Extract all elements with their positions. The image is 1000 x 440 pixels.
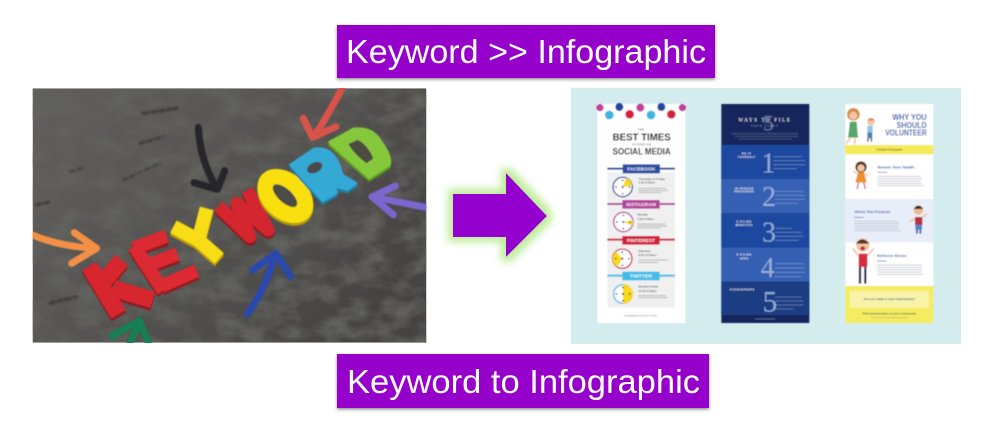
arrow: purple: [372, 186, 426, 215]
section: Boosts Your Health: [878, 165, 924, 186]
infographic: why you should volunteer: A Helpful Infographic: [876, 148, 903, 152]
step 4: APPS: [740, 258, 749, 261]
illustration: woman and child: [846, 108, 875, 144]
section: Boosts Your Health: Boosts Your Health: [878, 165, 915, 170]
step 4: [737, 253, 805, 284]
banner: Pinterest: [607, 236, 675, 245]
call to action: Are you ready to start volunteering?: [864, 297, 915, 301]
arrow: purple block arrow with green glow: [453, 173, 547, 257]
banner: Instagram: INSTAGRAM: [626, 202, 656, 208]
infographic: best times to post on social media: THE: [638, 127, 644, 131]
illustration: man: [853, 238, 874, 284]
title: VOLUNTEER: [885, 129, 927, 138]
footer text: [ BUSINESS SOCIETY.COM ]: [624, 316, 658, 318]
text: Instagram times: [637, 213, 667, 228]
section: Relieves Stress: Relieves Stress: [877, 253, 907, 258]
clock: Instagram: [614, 212, 633, 232]
step 2: 2: [762, 182, 776, 213]
arrow: black: [194, 127, 225, 189]
infographic: best times to post on social media: [596, 103, 686, 323]
section: Gives You Purpose: [854, 209, 900, 231]
title: WHY YOU: [892, 113, 927, 122]
title: Keyword >> Infographic: [337, 25, 715, 78]
step 3: E-FILING: [737, 222, 752, 224]
text: Facebook times: [638, 177, 668, 193]
letter R: [291, 149, 356, 203]
step 2: [734, 182, 805, 213]
illustration: girl: [853, 161, 868, 189]
banner: Twitter: [607, 272, 675, 280]
text: Twitter times: 12:00-6:00pm: [638, 289, 657, 293]
letter O: [256, 168, 314, 226]
step 5: [730, 287, 803, 319]
text: Pinterest times: Saturday: [638, 249, 651, 253]
header: [732, 110, 798, 139]
title: Keyword >> Infographic: Keyword >> Infographic: [346, 33, 706, 70]
panel: infographic examples: [571, 88, 961, 344]
title: Keyword to Infographic: Keyword to Infographic: [347, 363, 700, 400]
text: Facebook times: 1:00-3:00pm: [638, 181, 656, 185]
banner: Facebook: [607, 164, 675, 173]
text: Pinterest times: [638, 249, 668, 263]
banner: Instagram: [607, 200, 675, 209]
title: Keyword to Infographic: [337, 354, 709, 408]
step 2: IN-PERSON: [735, 188, 754, 190]
header: WAYS TO FILE: [738, 119, 792, 124]
text: Facebook times: Thursday & Friday: [638, 177, 666, 181]
section: Gives You Purpose: Gives You Purpose: [854, 209, 891, 214]
step 1: YOURSELF: [738, 157, 756, 159]
infographic: best times to post on social media: TO POST ON: [632, 142, 651, 146]
letter K: [89, 260, 153, 317]
step 5: 5: [763, 287, 777, 319]
call to action: [862, 297, 917, 318]
letter Y: [173, 208, 219, 261]
arrow: green: [112, 321, 148, 343]
infographic: why you should volunteer: [845, 104, 933, 323]
step 1: [738, 148, 805, 179]
infographic: 5 ways to file your taxes: [721, 104, 809, 323]
step 2: PREPARERS: [734, 191, 754, 194]
arrow: red: [303, 88, 342, 137]
infographic: best times to post on social media: SOCIAL MEDIA: [613, 147, 671, 157]
banner: Pinterest: PINTEREST: [627, 238, 655, 244]
clock: Twitter: [614, 284, 633, 304]
call to action: Find opportunities in your community: [862, 312, 917, 316]
clock: Pinterest: [613, 249, 632, 268]
photo: colourful KEYWORD letters with arrows: [33, 88, 426, 343]
text: Instagram times: 3:00-4:00pm: [637, 217, 655, 221]
title: [885, 113, 927, 138]
illustration: boy: [909, 205, 927, 234]
text: Twitter times: Monday-Friday: [638, 285, 659, 289]
step 3: [736, 217, 803, 248]
arrow: blue: [247, 253, 291, 314]
section: Relieves Stress: [877, 253, 924, 275]
step 4: 4: [761, 253, 775, 284]
step 3: WEBSITES: [736, 225, 753, 227]
step 1: DO IT: [742, 154, 751, 156]
banner: Facebook: FACEBOOK: [627, 167, 656, 173]
arrow: orange: [33, 233, 97, 263]
step 3: 3: [762, 217, 776, 248]
title: SHOULD: [897, 121, 927, 130]
step 1: 1: [761, 148, 775, 179]
step 5: ACCOUNTANTS: [730, 289, 755, 292]
text: Instagram times: Monday: [637, 213, 648, 217]
header: 5: [763, 110, 774, 135]
step 4: E-FILING: [737, 255, 752, 257]
letter E: [133, 236, 197, 293]
text: Pinterest times: 8:00-11:00pm: [638, 253, 657, 257]
clock: Facebook: [613, 177, 632, 197]
letter D: [330, 129, 390, 180]
letter W: [218, 190, 268, 239]
banner: Twitter: TWITTER: [630, 274, 652, 280]
header: YOUR TAXES: [751, 124, 779, 127]
infographic: best times to post on social media: BEST TIMES: [613, 133, 671, 144]
text: Twitter times: [638, 285, 668, 298]
